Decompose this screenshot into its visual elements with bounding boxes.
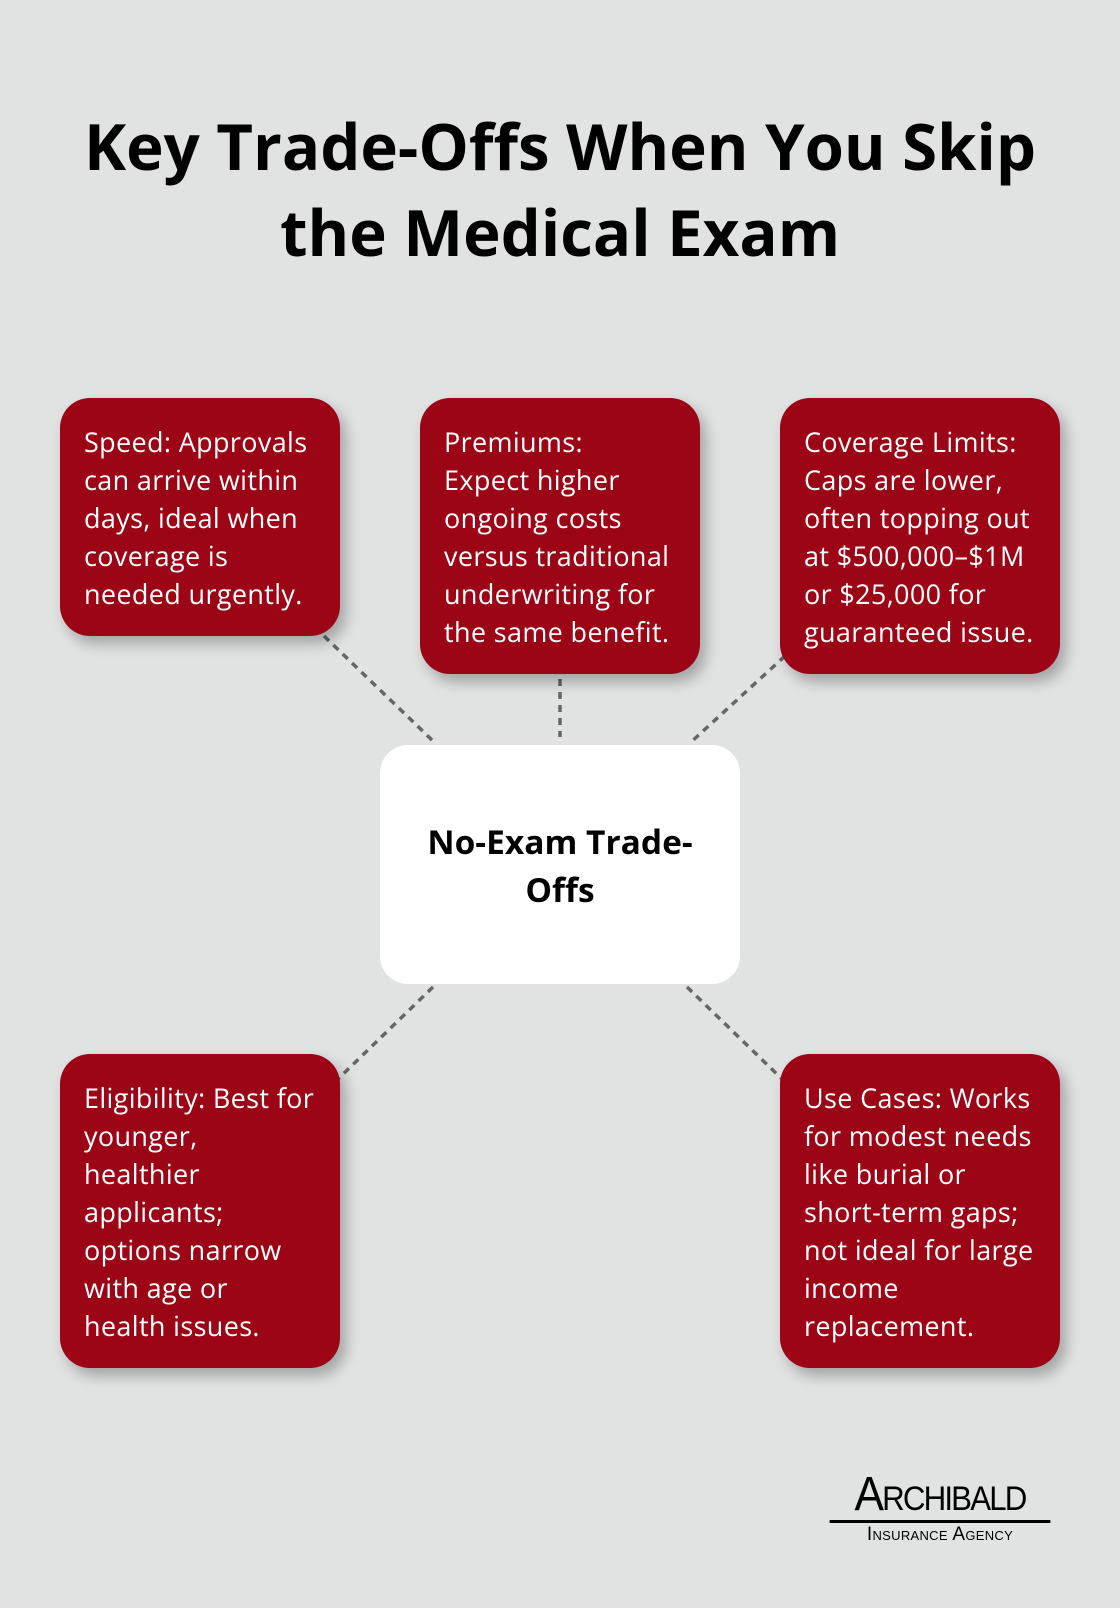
panel: premiums: the same benefit.: [444, 613, 669, 650]
panel: use cases: Use Cases: Works: [804, 1079, 1031, 1116]
panel: speed: needed urgently.: [84, 575, 303, 612]
title: Key Trade-Offs When You Skip: [84, 102, 1036, 189]
panel: speed: can arrive within: [84, 461, 298, 498]
panel: coverage limits: or $25,000 for: [804, 575, 986, 612]
panel: use cases: income: [804, 1269, 899, 1306]
panel: premiums: [420, 398, 700, 674]
title: the Medical Exam: [280, 188, 840, 275]
panel: use cases: replacement.: [804, 1307, 974, 1344]
panel: eligibility: healthier: [84, 1155, 200, 1192]
panel: coverage limits: at $500,000–$1M: [804, 537, 1025, 574]
panel: eligibility: applicants;: [84, 1193, 224, 1230]
panel: premiums: ongoing costs: [444, 499, 622, 536]
panel: use cases: for modest needs: [804, 1117, 1032, 1154]
panel: eligibility: Eligibility: Best for: [84, 1079, 314, 1116]
panel: speed: coverage is: [84, 537, 228, 574]
panel: premiums: versus traditional: [444, 537, 669, 574]
panel: coverage limits: often topping out: [804, 499, 1030, 536]
panel: speed: Speed: Approvals: [84, 423, 307, 460]
panel: eligibility: health issues.: [84, 1307, 260, 1344]
panel: eligibility: with age or: [84, 1269, 228, 1306]
panel: use cases: not ideal for large: [804, 1231, 1033, 1268]
panel: coverage limits: [780, 398, 1060, 674]
panel: use cases: like burial or: [804, 1155, 966, 1192]
panel: premiums: underwriting for: [444, 575, 655, 612]
panel: eligibility: options narrow: [84, 1231, 282, 1268]
panel: premiums: Premiums:: [444, 423, 583, 460]
logo: [830, 1468, 1050, 1545]
title: [84, 102, 1036, 275]
logo: Archibald: [854, 1468, 1026, 1521]
center node: [380, 745, 740, 984]
panel: use cases: short-term gaps;: [804, 1193, 1019, 1230]
panel: eligibility: [60, 1054, 340, 1368]
panel: coverage limits: guaranteed issue.: [804, 613, 1034, 650]
panel: premiums: Expect higher: [444, 461, 620, 498]
center node: No-Exam Trade-: [427, 818, 693, 864]
center node: Offs: [525, 866, 595, 912]
panel: coverage limits: Caps are lower,: [804, 461, 1003, 498]
panel: speed: [60, 398, 340, 636]
panel: eligibility: younger,: [84, 1117, 198, 1154]
logo: Insurance Agency: [867, 1524, 1013, 1545]
panel: use cases: [780, 1054, 1060, 1368]
panel: speed: days, ideal when: [84, 499, 298, 536]
panel: coverage limits: Coverage Limits:: [804, 423, 1017, 460]
